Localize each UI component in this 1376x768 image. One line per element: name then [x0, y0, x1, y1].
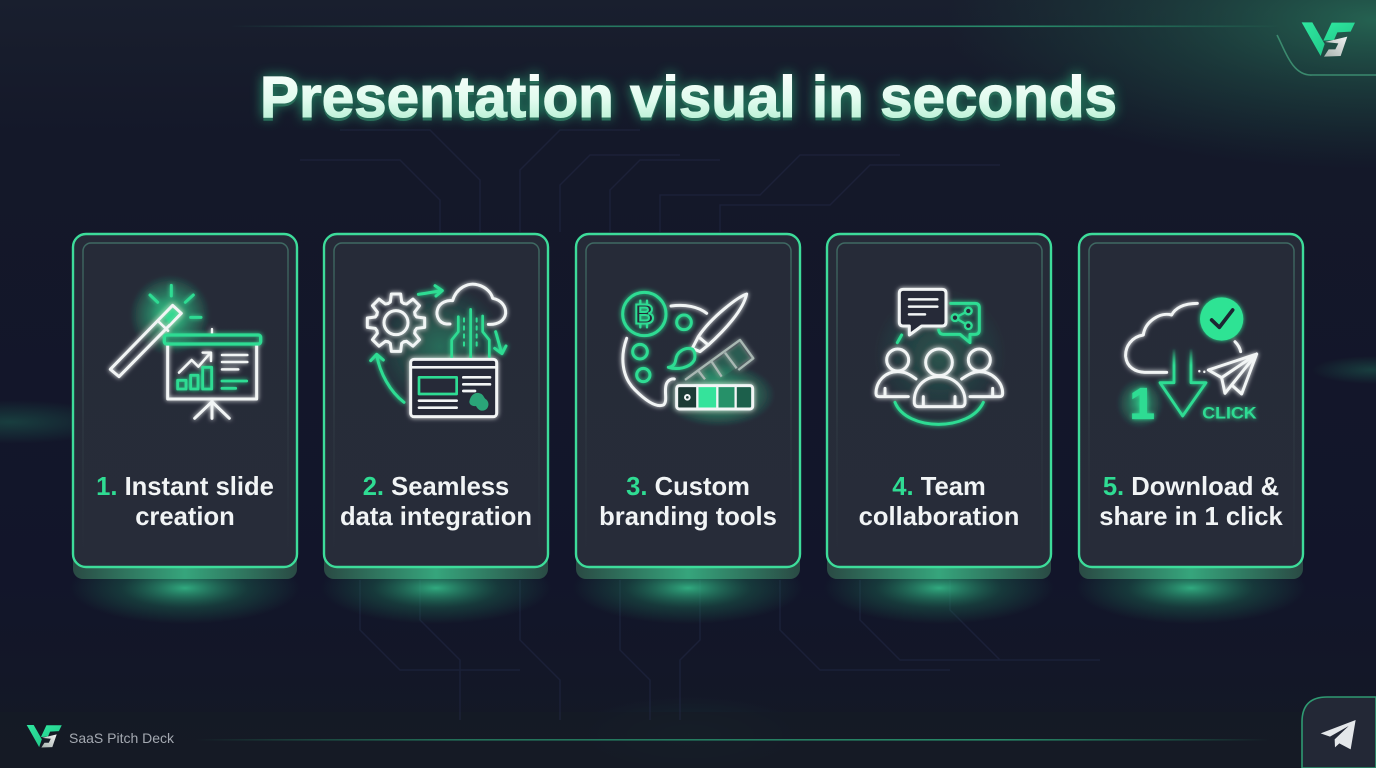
- label: 3. Custom: [626, 473, 750, 501]
- title: Presentation visual in seconds: [260, 68, 1117, 133]
- panel: card 1: creation: [135, 503, 235, 531]
- footer brand: [27, 725, 175, 748]
- icon: bitcoin palette, brush and swatches: [623, 292, 775, 427]
- panel: card 3: branding tools: [599, 503, 777, 531]
- panel: card 1: [70, 234, 300, 624]
- footer line: [195, 739, 1270, 741]
- panel: card 2: [321, 234, 551, 624]
- panel: card 4: collaboration: [859, 503, 1019, 531]
- panel: card 5: [1076, 234, 1306, 624]
- title: Presentation visual in seconds: [260, 65, 1117, 130]
- logo top right: [1302, 22, 1355, 57]
- top line: [230, 26, 1280, 27]
- label: 1. Instant slide: [96, 473, 274, 501]
- icon: cloud download, check, paper plane, 1 click: [1117, 297, 1257, 428]
- panel: card 2: data integration: [340, 503, 532, 531]
- icon: paper plane: [1321, 720, 1356, 749]
- label: 5. Download &: [1103, 473, 1279, 501]
- logo bottom left: [27, 725, 62, 748]
- panel: card 3: [573, 234, 803, 624]
- icon: cloud download, check, paper plane, 1 click: CLICK: [1202, 403, 1257, 422]
- footer text: SaaS Pitch Deck: [69, 730, 175, 746]
- icon: gear, cloud and data dashboard: [367, 283, 506, 417]
- label: 2. Seamless: [363, 473, 509, 501]
- icon: bitcoin palette, brush and swatches: B: [634, 299, 654, 330]
- icon: magic wand and presentation board: [110, 275, 261, 418]
- corner tab: logo: [1277, 22, 1376, 75]
- icon: cloud download, check, paper plane, 1 click: 1: [1130, 379, 1154, 428]
- corner tab: send: [1302, 697, 1376, 768]
- icon: team with chat bubbles: [873, 288, 1007, 424]
- title: Presentation visual in seconds: [260, 65, 1117, 130]
- label: 4. Team: [892, 473, 986, 501]
- panel: card 5: share in 1 click: [1099, 503, 1284, 531]
- panel: card 4: [824, 234, 1054, 624]
